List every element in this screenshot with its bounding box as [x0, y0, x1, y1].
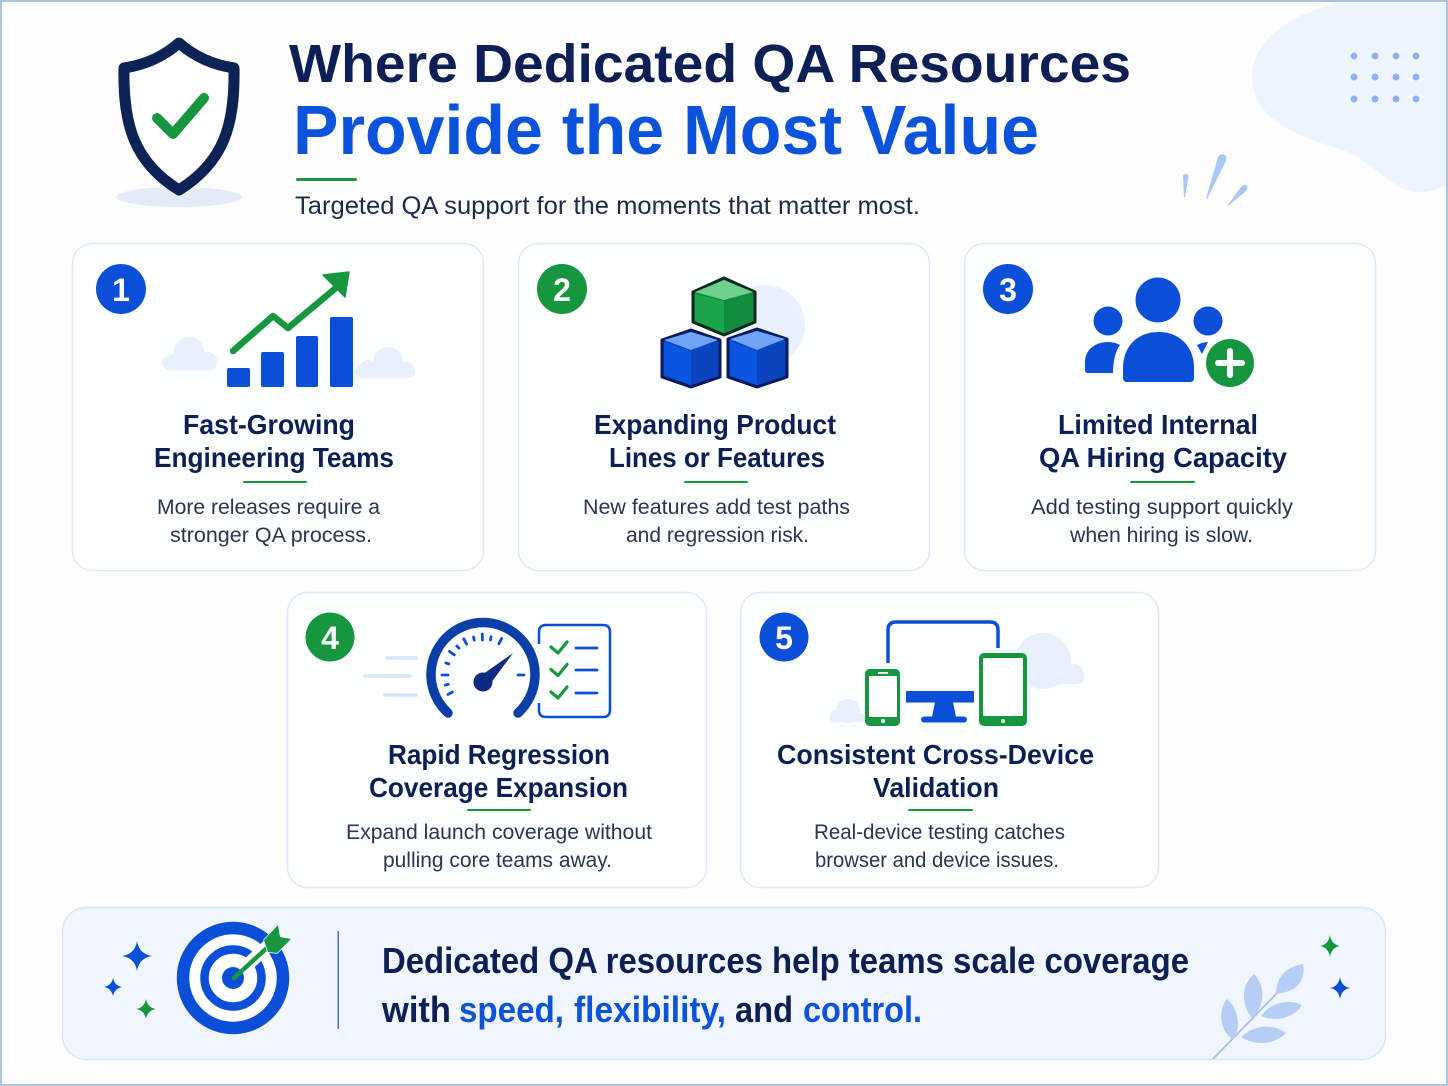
panel: card 2 expanding product lines — [518, 244, 930, 570]
card 5 heading: Consistent Cross-Device — [777, 739, 1094, 770]
icon: sparkles right — [1320, 935, 1350, 999]
card 5 description — [814, 821, 1065, 872]
card 4 heading: Rapid Regression — [388, 739, 610, 770]
banner text: flexibility, — [574, 989, 726, 1030]
card 2 heading: Expanding Product — [594, 409, 836, 440]
icon: sparkles left — [104, 941, 156, 1019]
banner text: with — [381, 989, 451, 1030]
number badge 1: 1 — [112, 272, 130, 308]
number badge 2 — [537, 264, 587, 314]
card 4 heading: Coverage Expansion — [369, 772, 628, 803]
card 3 description: when hiring is slow. — [1069, 524, 1253, 547]
card 1 heading: Engineering Teams — [154, 442, 394, 473]
card 2 description — [583, 496, 850, 547]
card 4 description: pulling core teams away. — [383, 849, 612, 872]
card 1 description — [157, 496, 380, 547]
number badge 2: 2 — [553, 272, 571, 308]
card 3 description — [1031, 496, 1294, 547]
card 3 heading — [1039, 409, 1287, 473]
card 5 description: browser and device issues. — [815, 849, 1059, 872]
card 1 description: More releases require a — [157, 496, 380, 519]
card 2 heading — [594, 409, 836, 473]
card 4 description — [346, 821, 652, 872]
icon: leaf branch — [1213, 964, 1304, 1059]
banner text: speed, — [459, 989, 564, 1030]
card 3 description: Add testing support quickly — [1031, 496, 1294, 519]
icon: speedometer and checklist — [365, 623, 610, 717]
panel: card 4 rapid regression coverage — [288, 592, 706, 888]
icon: growth bars and arrow — [162, 272, 415, 387]
card 2 description: New features add test paths — [583, 496, 850, 519]
card 5 description: Real-device testing catches — [814, 821, 1065, 844]
icon: target with arrow — [183, 925, 291, 1028]
card 4 description: Expand launch coverage without — [346, 821, 652, 844]
card 5 heading: Validation — [873, 772, 999, 803]
number badge 5 — [760, 612, 808, 662]
panel: card 3 limited hiring capacity — [964, 244, 1376, 570]
subtitle: Targeted QA support for the moments that matter most. — [295, 192, 920, 220]
card 4 heading — [369, 739, 628, 803]
banner text: Dedicated QA resources help teams scale coverage — [382, 940, 1189, 981]
number badge 3: 3 — [999, 272, 1017, 308]
panel: card 1 fast-growing engineering teams — [72, 244, 484, 570]
title underline — [296, 178, 357, 181]
title — [289, 34, 1131, 169]
title: Provide the Most Value — [293, 91, 1039, 169]
number badge 4: 4 — [321, 620, 339, 656]
number badge 3 — [983, 264, 1033, 314]
card 2 heading: Lines or Features — [609, 442, 825, 473]
card 3 heading: QA Hiring Capacity — [1039, 442, 1287, 473]
decorative blob with dots — [1252, 3, 1446, 192]
card 1 description: stronger QA process. — [170, 524, 372, 547]
number badge 4 — [306, 612, 354, 662]
card 2 description: and regression risk. — [626, 524, 809, 547]
card 3 heading: Limited Internal — [1058, 409, 1258, 440]
panel: bottom summary banner — [62, 908, 1386, 1060]
icon: team with plus — [1085, 278, 1254, 387]
banner text — [381, 940, 1189, 1030]
icon: shield with check — [116, 43, 242, 207]
title: Where Dedicated QA Resources — [289, 34, 1131, 94]
card 1 heading — [154, 409, 394, 473]
icon: stacked cubes — [662, 278, 805, 387]
banner text: and — [735, 989, 793, 1030]
icon: desktop phone and tablet — [830, 622, 1084, 726]
number badge 5: 5 — [775, 620, 793, 656]
card 5 heading — [777, 739, 1094, 803]
number badge 1 — [96, 264, 146, 314]
decorative spark marks — [1183, 154, 1247, 206]
banner text: control. — [803, 989, 922, 1030]
card 1 heading: Fast-Growing — [183, 409, 355, 440]
panel: card 5 cross-device validation — [740, 592, 1158, 888]
